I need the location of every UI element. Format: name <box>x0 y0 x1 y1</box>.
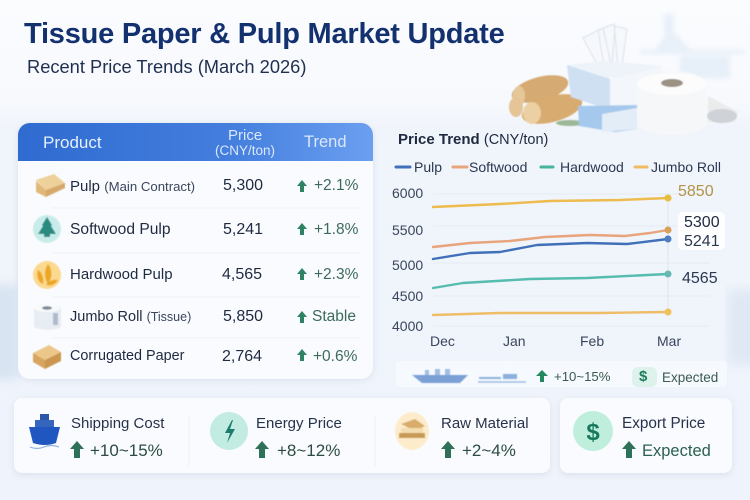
panel: product price table: +0.6% <box>313 348 357 365</box>
strip text: +10~15% <box>554 369 610 384</box>
line chart: 4565 <box>682 270 718 287</box>
legend: Softwood <box>469 159 527 175</box>
table header: Trend <box>304 133 346 151</box>
line chart: 5241 <box>684 233 720 250</box>
axes labels: Jan <box>503 333 526 349</box>
panel: product price table: 5,850 <box>223 308 263 325</box>
strip: shipping and export summary <box>396 361 727 387</box>
title: Tissue Paper & Pulp Market Update <box>24 18 505 50</box>
table header: (CNY/ton) <box>215 143 275 158</box>
icon: corrugated paper <box>33 345 61 369</box>
stat: raw material: Raw Material <box>441 415 529 432</box>
panel: cost summary <box>14 398 550 473</box>
axes labels: 4500 <box>392 288 423 304</box>
line chart: 5300 <box>684 214 720 231</box>
panel: product price table: +2.3% <box>314 266 358 283</box>
panel: product price table: 2,764 <box>222 348 262 365</box>
axes labels: 4000 <box>392 318 423 334</box>
panel: product price table <box>18 123 373 379</box>
text: +8~12% <box>277 441 340 460</box>
icon: ships <box>412 367 657 387</box>
table header <box>18 123 373 161</box>
axes labels: Mar <box>657 333 681 349</box>
series <box>433 198 668 315</box>
panel: export price <box>560 398 732 473</box>
panel: product price table: 4,565 <box>222 266 262 283</box>
chart title: Price Trend (CNY/ton) <box>398 131 548 148</box>
stat: shipping cost: Shipping Cost <box>71 415 164 432</box>
icon: pulp sheets <box>36 174 65 197</box>
axes labels: 5000 <box>392 257 423 273</box>
panel: product price table: 5,241 <box>223 221 263 238</box>
icon: ship <box>29 414 60 448</box>
legend: Hardwood <box>560 159 624 175</box>
table header: Product <box>43 133 102 152</box>
illustration: tissue box, logs and toilet roll <box>508 14 744 132</box>
text: Expected <box>642 442 711 460</box>
row: softwood: Softwood Pulp <box>70 221 171 238</box>
axes labels: 6000 <box>392 185 423 201</box>
icon: dollar: $ <box>586 419 600 446</box>
icon: dollar <box>573 411 613 451</box>
icon: energy bolt <box>210 412 248 450</box>
trend arrows <box>297 180 307 361</box>
tissue box <box>567 61 663 78</box>
text: +10~15% <box>90 441 163 460</box>
panel: product price table: 5,300 <box>223 177 263 194</box>
row: pulp: Pulp (Main Contract) <box>70 178 195 195</box>
value labels <box>678 212 725 250</box>
strip expected: Expected <box>662 370 718 385</box>
stat: energy price: Energy Price <box>256 415 342 432</box>
icon: softwood tree <box>33 215 61 243</box>
summary arrows <box>70 441 636 458</box>
row: corrugated: Corrugated Paper <box>70 348 184 364</box>
text: +2~4% <box>462 441 516 460</box>
panel: product price table: Stable <box>312 308 356 325</box>
panel: product price table: +1.8% <box>314 221 358 238</box>
line chart <box>392 159 725 349</box>
row: hardwood: Hardwood Pulp <box>70 266 173 283</box>
subtitle: Recent Price Trends (March 2026) <box>27 56 306 77</box>
line chart: 5850 <box>678 183 714 200</box>
stat: export price: Export Price <box>622 415 705 432</box>
table header: Price <box>228 127 262 144</box>
icon: raw material <box>395 412 429 450</box>
summary icons <box>29 411 636 466</box>
legend: Pulp <box>414 159 442 175</box>
axes labels: 5500 <box>392 222 423 238</box>
icon: hardwood leaf <box>33 261 61 289</box>
panel: product price table: +2.1% <box>314 177 358 194</box>
legend: Jumbo Roll <box>651 159 721 175</box>
strip dollar: $ <box>639 368 647 385</box>
axes labels <box>392 185 681 349</box>
icon: jumbo roll <box>34 304 61 330</box>
row: jumbo roll: Jumbo Roll (Tissue) <box>70 309 191 325</box>
table rows <box>32 174 360 370</box>
axes labels: Dec <box>430 333 455 349</box>
logs <box>509 70 571 108</box>
legend <box>396 159 721 175</box>
faded ship <box>640 14 745 78</box>
roll <box>637 71 707 135</box>
tissue <box>583 24 627 66</box>
axes labels: Feb <box>580 333 604 349</box>
